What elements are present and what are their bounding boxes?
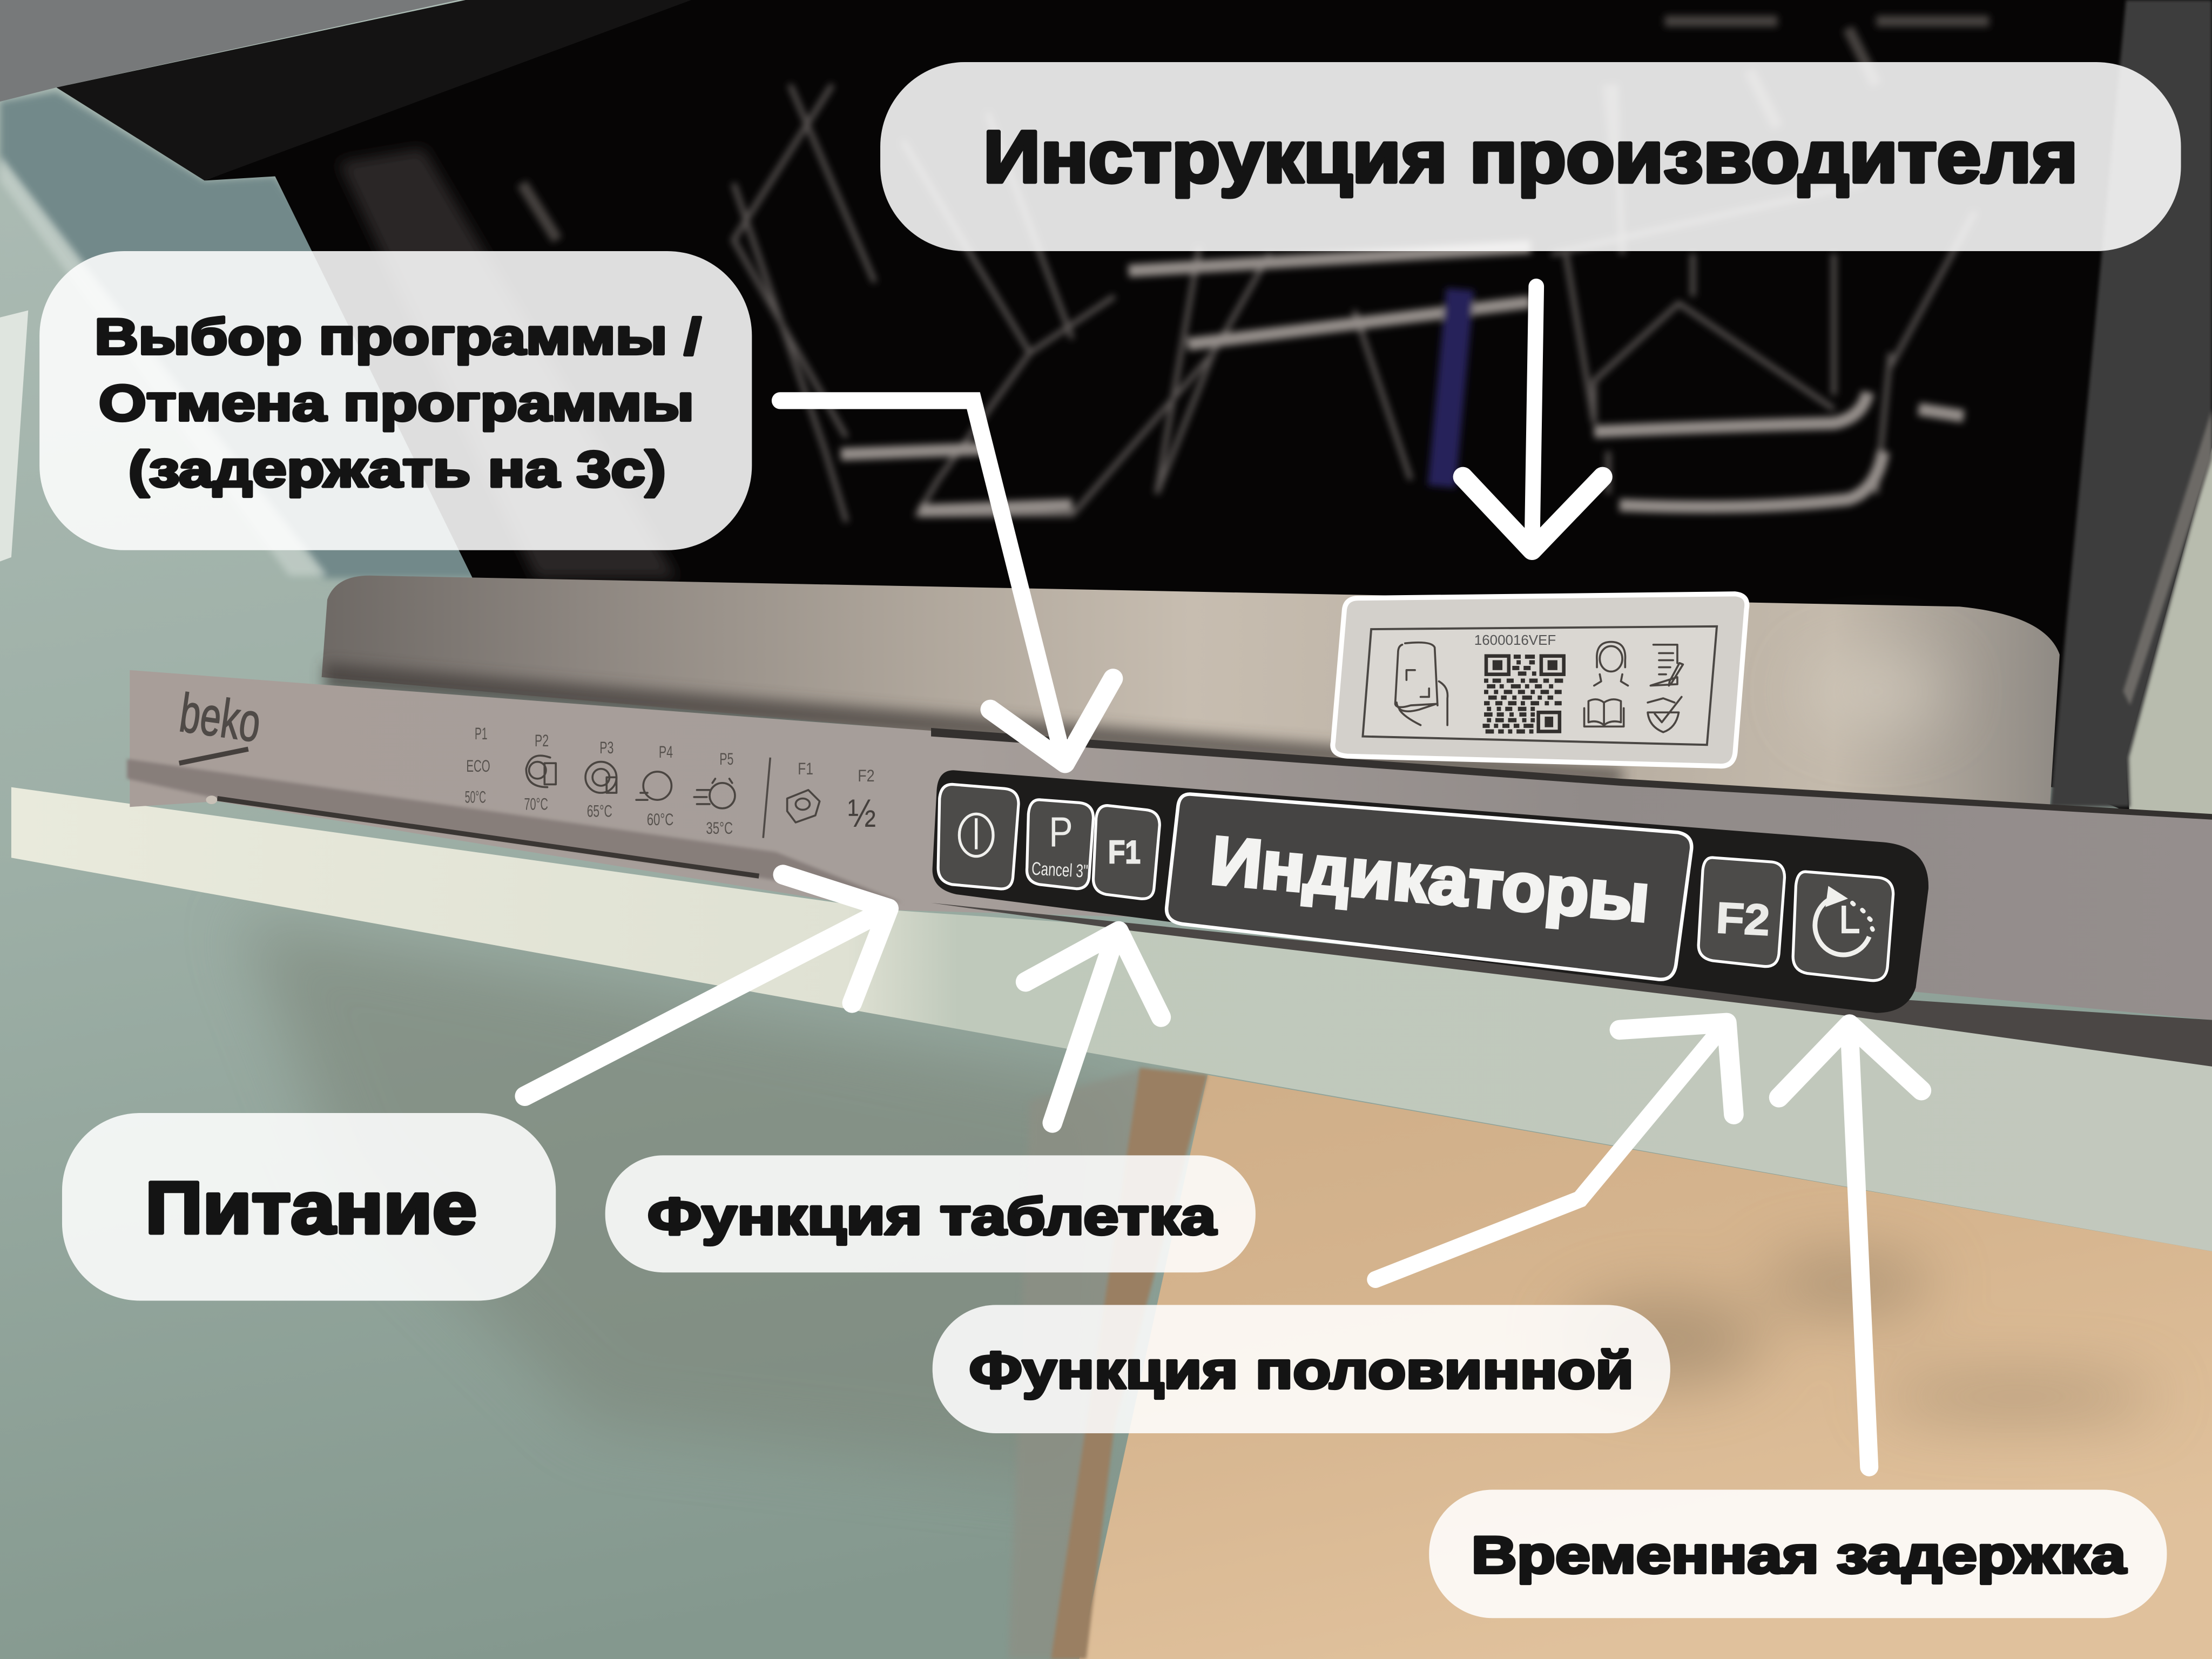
background: shadow under door bbox=[240, 917, 1129, 1481]
dish rack wires bbox=[522, 21, 1989, 522]
callout: half load function: Функция половинной bbox=[969, 1341, 1634, 1399]
arrow: program select bbox=[780, 401, 1113, 763]
label: indicators: Индикаторы bbox=[1208, 822, 1653, 936]
background: grey cabinet side strip bbox=[1009, 1068, 1145, 1659]
arrow: power bbox=[525, 875, 889, 1096]
button: F1 bbox=[1093, 806, 1159, 899]
QR code bbox=[1482, 655, 1564, 733]
stainless inner door panel bbox=[322, 576, 2060, 811]
program symbols P1–P5, F1, F2: P2 bbox=[535, 731, 549, 750]
background: countertop bbox=[0, 0, 458, 102]
background: cream wall at the right bbox=[2126, 447, 2212, 832]
button: P cancel: P bbox=[1049, 808, 1073, 855]
background: brown door frame strip bbox=[1051, 1068, 1208, 1659]
callout: power: Питание bbox=[145, 1166, 477, 1249]
panel lower darker strip bbox=[127, 759, 903, 903]
callout: time delay: Временная задержка bbox=[1472, 1527, 2127, 1584]
callout: power bbox=[62, 1113, 556, 1300]
background: dishwasher right frame bbox=[2050, 0, 2212, 807]
program symbols P1–P5, F1, F2: 50°C bbox=[465, 787, 486, 806]
program symbols P1–P5, F1, F2: 70°C bbox=[524, 794, 548, 813]
callout: manufacturer instruction bbox=[880, 62, 2181, 251]
arrow: tablet function bbox=[1026, 931, 1161, 1123]
program symbols P1–P5, F1, F2: P1 bbox=[475, 724, 488, 743]
button: P cancel bbox=[1027, 800, 1093, 889]
program symbols P1–P5, F1, F2: 35°C bbox=[706, 819, 733, 838]
background: dishwasher interior bbox=[205, 0, 2212, 846]
background: counter underside bbox=[56, 0, 691, 180]
program symbols P1–P5, F1, F2: F2 bbox=[858, 766, 875, 785]
button: power bbox=[938, 784, 1019, 889]
callout: manufacturer instruction: Инструкция производителя bbox=[983, 116, 2078, 198]
program symbols P1–P5, F1, F2: ECO bbox=[466, 757, 490, 775]
arrow: half load function bbox=[1375, 1023, 1734, 1279]
program symbols P1–P5, F1, F2: ½ bbox=[848, 792, 876, 835]
background: pale diagonal cabinet edge bbox=[0, 155, 327, 576]
button: F2 bbox=[1698, 858, 1784, 967]
inner door lower shading bbox=[325, 663, 1622, 784]
icon: shield check bbox=[1648, 697, 1682, 732]
light reflection on steel bbox=[1806, 657, 1947, 725]
serial number: 1600016VEF bbox=[1474, 632, 1556, 648]
background: interior wall side bbox=[339, 148, 677, 578]
background: frame highlight bbox=[2123, 409, 2212, 705]
callout: program select and cancel bbox=[39, 251, 752, 550]
QR instruction sticker bbox=[1333, 594, 1747, 766]
icon: phone scanning bbox=[1395, 643, 1447, 725]
callout: program select and cancel: Выбор программы / bbox=[95, 308, 701, 365]
panel top shadow bbox=[931, 728, 2212, 820]
callout: tablet function: Функция таблетка bbox=[648, 1188, 1217, 1246]
front control panel band bbox=[130, 670, 2212, 1020]
background: dark patches on the floor bbox=[1566, 1253, 2159, 1417]
program symbols P1–P5, F1, F2: F1 bbox=[798, 759, 813, 778]
icon: support operator bbox=[1594, 642, 1628, 686]
program symbols P1–P5, F1, F2 bbox=[465, 724, 876, 838]
brand logo: beko: beko bbox=[176, 683, 264, 754]
background: white cabinet edge bbox=[0, 311, 28, 562]
panel bottom shadow line bbox=[217, 799, 759, 876]
button: delay timer bbox=[1793, 872, 1893, 981]
button: P cancel: Cancel 3" bbox=[1031, 859, 1089, 882]
arrow: manufacturer instruction bbox=[1463, 286, 1603, 550]
icon: document bbox=[1650, 645, 1683, 686]
background: wooden floor bbox=[1079, 1075, 2212, 1659]
program symbols P1–P5, F1, F2: 65°C bbox=[587, 801, 612, 820]
callout: time delay bbox=[1429, 1490, 2167, 1618]
arrow: time delay bbox=[1779, 1024, 1921, 1467]
callout: program select and cancel: (задержать на 3с) bbox=[129, 441, 666, 497]
button: F1: F1 bbox=[1108, 834, 1141, 871]
panel dark bottom strip bbox=[931, 903, 2212, 1067]
callout: half load function bbox=[933, 1305, 1670, 1433]
callout: tablet function bbox=[605, 1155, 1256, 1272]
program symbols P1–P5, F1, F2: 60°C bbox=[647, 810, 673, 829]
control strip bbox=[933, 770, 1928, 1013]
program symbols P1–P5, F1, F2: P5 bbox=[719, 750, 733, 768]
program symbols P1–P5, F1, F2: P3 bbox=[599, 738, 613, 757]
icon: book bbox=[1584, 699, 1624, 726]
dishwasher door bbox=[11, 787, 2212, 1251]
background: dark teal cabinet side bbox=[0, 92, 564, 578]
program symbols P1–P5, F1, F2: P4 bbox=[659, 743, 673, 761]
callout: program select and cancel: Отмена программы bbox=[99, 374, 694, 431]
label: indicators bbox=[1166, 794, 1691, 980]
button: F2: F2 bbox=[1715, 894, 1771, 945]
rivet bbox=[206, 795, 217, 804]
